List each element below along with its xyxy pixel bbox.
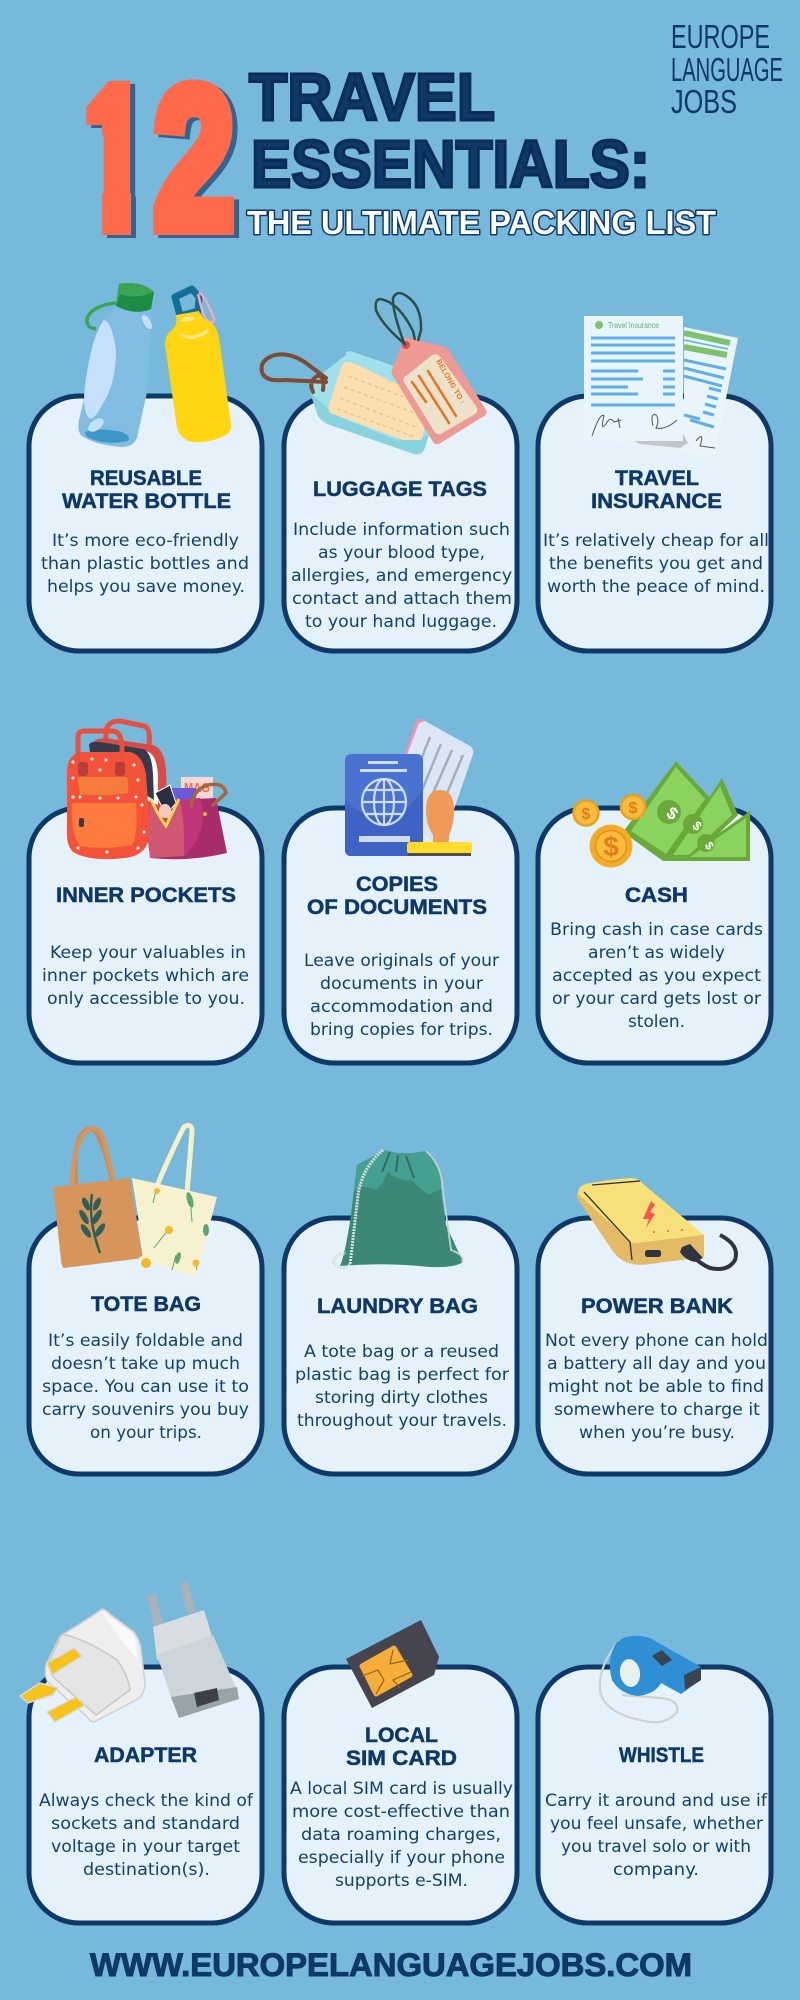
panel: laundry bag: A tote bag or a reused <box>304 1342 499 1361</box>
icon: insurance documents <box>584 316 738 459</box>
heading: Travel Essentials: ESSENTIALS: <box>251 127 650 202</box>
panel: cash: stolen. <box>628 1012 685 1031</box>
title number 12: 1 <box>90 54 149 268</box>
icon: luggage tags: BELONG TO : <box>434 358 467 405</box>
panel: tote bag: TOTE BAG <box>91 1293 201 1316</box>
icon: laundry bag <box>333 1150 463 1268</box>
icon: cash and coins: $ <box>603 831 619 862</box>
icon: cash and coins: $ <box>629 800 638 817</box>
icon: whistle <box>600 1636 701 1722</box>
panel: luggage tags: to your hand luggage. <box>305 612 497 631</box>
panel: power bank: somewhere to charge it <box>554 1400 761 1419</box>
panel: reusable water bottle: WATER BOTTLE <box>62 490 231 513</box>
panel: cash: or your card gets lost or <box>552 989 761 1008</box>
panel: luggage tags <box>284 396 517 651</box>
icon: power bank <box>577 1178 736 1269</box>
title number 12: 2 <box>154 46 234 269</box>
panel: local SIM card: SIM CARD <box>346 1747 457 1770</box>
panel: adapter: ADAPTER <box>94 1744 197 1767</box>
title number 12 <box>86 79 240 238</box>
panel: reusable water bottle: REUSABLE <box>90 467 202 490</box>
panel: travel insurance: worth the peace of mind. <box>547 577 765 596</box>
footer website url: WWW.EUROPELANGUAGEJOBS.COM <box>90 1947 692 1983</box>
panel: copies of documents: Leave originals of your <box>304 951 499 970</box>
panel: laundry bag: plastic bag is perfect for <box>295 1365 509 1384</box>
icon: cash and coins: $ <box>582 806 591 823</box>
icon: luggage tags <box>262 293 487 454</box>
panel: cash <box>538 808 771 1063</box>
panel: power bank: POWER BANK <box>581 1295 733 1318</box>
logo: Europe Language Jobs: JOBS <box>671 83 737 120</box>
panel: laundry bag: LAUNDRY BAG <box>317 1295 478 1318</box>
panel: cash: Bring cash in case cards <box>550 920 763 939</box>
panel: local SIM card: supports e-SIM. <box>335 1871 468 1890</box>
logo: Europe Language Jobs <box>671 18 783 120</box>
panel: local SIM card: more cost-effective than <box>292 1802 510 1821</box>
panel: luggage tags: contact and attach them <box>292 589 512 608</box>
panel: local SIM card: especially if your phone <box>298 1848 505 1867</box>
panel: travel insurance: the benefits you get and <box>549 554 763 573</box>
panel: adapter: sockets and standard <box>51 1814 240 1833</box>
panel: whistle <box>538 1667 771 1923</box>
icon: cash and coins: $ <box>702 839 717 853</box>
icon: tote bags <box>53 1125 217 1277</box>
icon: cash and coins: $ <box>689 818 706 834</box>
panel: luggage tags: LUGGAGE TAGS <box>313 478 487 501</box>
icon: backpack and handbag: MAG <box>184 780 210 795</box>
panel: whistle: WHISTLE <box>619 1744 704 1767</box>
panel: power bank: when you’re busy. <box>579 1423 735 1442</box>
panel: adapter <box>29 1667 262 1923</box>
heading: Travel Essentials <box>249 60 650 202</box>
panel: reusable water bottle: It’s more eco-friendly <box>52 531 239 550</box>
panel: whistle: company. <box>613 1860 699 1879</box>
panel: copies of documents: OF DOCUMENTS <box>307 896 487 919</box>
panel: tote bag: doesn’t take up much <box>51 1354 240 1373</box>
icon: insurance documents: Travel Insurance <box>608 321 659 330</box>
panel: whistle: you feel unsafe, whether <box>550 1814 763 1833</box>
panel: travel insurance: It’s relatively cheap for all <box>543 531 769 550</box>
panel: travel insurance: TRAVEL <box>615 467 699 490</box>
panel: inner pockets: inner pockets which are <box>42 966 249 985</box>
panel: power bank <box>538 1218 771 1474</box>
panel: luggage tags: allergies, and emergency <box>291 566 512 585</box>
panel: power bank: a battery all day and you <box>547 1354 766 1373</box>
title number 12: 2 <box>159 49 239 272</box>
heading: Travel Essentials: TRAVEL <box>249 60 495 135</box>
panel: cash: accepted as you expect <box>552 966 762 985</box>
panel: luggage tags: Include information such <box>293 520 510 539</box>
panel: local SIM card: data roaming charges, <box>301 1825 501 1844</box>
panel: tote bag: carry souvenirs you buy <box>42 1400 249 1419</box>
panel: adapter: Always check the kind of <box>39 1791 254 1810</box>
subheading: The Ultimate Packing List: THE ULTIMATE PACKING LIST <box>247 204 716 241</box>
panel: travel insurance <box>538 396 771 651</box>
panel: inner pockets: INNER POCKETS <box>56 884 236 907</box>
panel: copies of documents: bring copies for trips. <box>310 1020 493 1039</box>
panel: tote bag: on your trips. <box>90 1423 202 1442</box>
panel: tote bag: It’s easily foldable and <box>48 1331 243 1350</box>
icon: cash and coins: $ <box>663 803 682 824</box>
panel: whistle: Carry it around and use if <box>545 1791 768 1810</box>
icon: plug adapters <box>20 1582 239 1722</box>
panel: laundry bag: throughout your travels. <box>297 1411 507 1430</box>
panel: inner pockets <box>29 808 262 1063</box>
panel: inner pockets: Keep your valuables in <box>50 943 246 962</box>
panel: power bank: might not be able to find <box>548 1377 764 1396</box>
icon: backpack and handbag <box>67 721 227 859</box>
panel: travel insurance: INSURANCE <box>591 490 722 513</box>
panel: local SIM card <box>284 1667 517 1923</box>
panel: local SIM card: A local SIM card is usually <box>290 1779 513 1798</box>
panel: laundry bag: storing dirty clothes <box>315 1388 488 1407</box>
panel: luggage tags: as your blood type, <box>318 543 485 562</box>
icon: cash and coins <box>574 761 750 868</box>
icon: passport, ticket and stamp <box>345 719 473 856</box>
panel: power bank: Not every phone can hold <box>545 1331 768 1350</box>
title number 12: 1 <box>85 51 144 265</box>
panel: inner pockets: only accessible to you. <box>47 989 245 1008</box>
panel: reusable water bottle: helps you save money. <box>47 577 245 596</box>
panel: cash: CASH <box>625 884 688 907</box>
panel: reusable water bottle <box>29 396 262 651</box>
panel: copies of documents <box>284 808 517 1063</box>
panel: tote bag <box>29 1218 262 1474</box>
panel: laundry bag <box>284 1218 517 1474</box>
panel: reusable water bottle: than plastic bottles and <box>41 554 249 573</box>
icon: water bottles <box>78 283 231 447</box>
panel: copies of documents: documents in your <box>320 974 483 993</box>
icon: SIM card <box>346 1620 439 1708</box>
panel: whistle: you travel solo or with <box>561 1837 751 1856</box>
panel: copies of documents: accommodation and <box>310 997 493 1016</box>
panel: adapter: voltage in your target <box>51 1837 241 1856</box>
panel: local SIM card: LOCAL <box>365 1724 438 1747</box>
panel: cash: aren’t as widely <box>588 943 725 962</box>
panel: copies of documents: COPIES <box>356 873 438 896</box>
panel: adapter: destination(s). <box>83 1860 210 1879</box>
panel: tote bag: space. You can use it to <box>42 1377 249 1396</box>
